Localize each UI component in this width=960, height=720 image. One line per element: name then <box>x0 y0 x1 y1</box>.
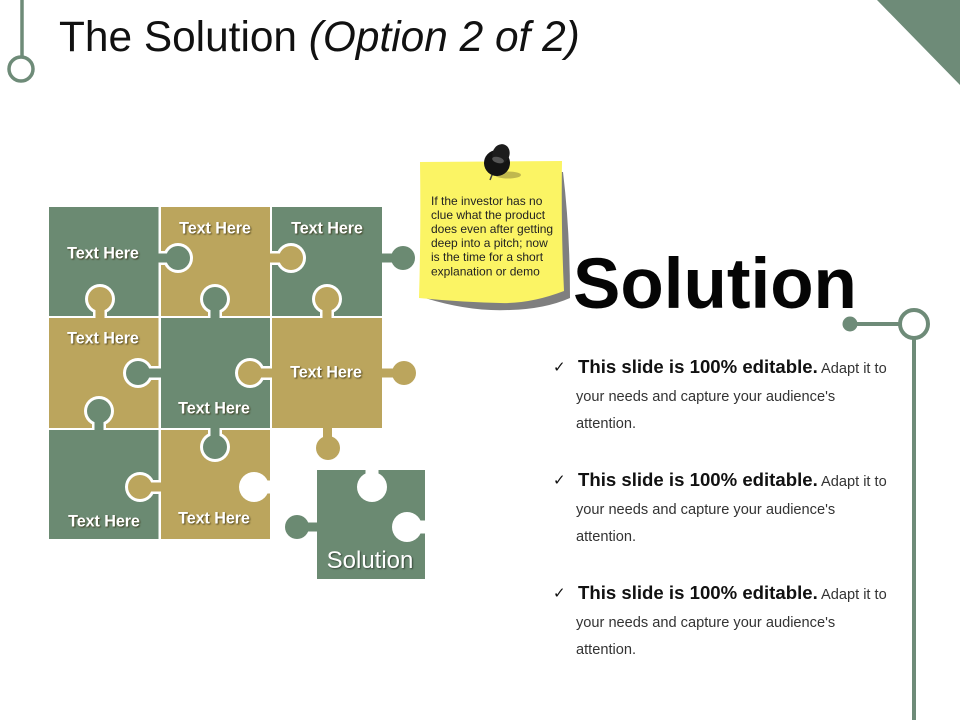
note text: does even after getting <box>431 222 553 236</box>
right connector ornament <box>842 310 928 720</box>
knob: gold into row 3 column 1 <box>125 472 161 502</box>
note text: If the investor has no <box>431 194 543 208</box>
knob: gold outward right of row 2 <box>382 361 416 385</box>
bullet 1: attention. <box>576 416 636 432</box>
bullet 1: your needs and capture your audience's <box>576 389 835 405</box>
knob: left <box>285 515 318 539</box>
solution puzzle piece <box>285 469 426 579</box>
hole: top <box>357 469 387 502</box>
text: row 2 column 3: Text Here <box>290 364 362 382</box>
piece: row 3 column 2 <box>161 430 270 539</box>
bullet 2: This slide is 100% editable. Adapt it to <box>578 469 887 490</box>
piece: row 2 column 2 <box>161 318 270 428</box>
note text: clue what the product <box>431 208 546 222</box>
note text: explanation or demo <box>431 264 540 278</box>
jigsaw puzzle <box>49 207 416 539</box>
text: row 2 column 1: Text Here <box>67 330 139 348</box>
note text: deep into a pitch; now <box>431 236 548 250</box>
text: row 2 column 2: Text Here <box>178 400 250 418</box>
bullet 3: attention. <box>576 642 636 658</box>
text: row 3 column 2: Text Here <box>178 510 250 528</box>
knob: green into row 1 column 2 bottom <box>200 284 230 319</box>
big solution heading: Solution <box>573 245 857 324</box>
knob: gold into row 1 column 3 bottom <box>312 284 342 319</box>
bullet 3: your needs and capture your audience's <box>576 615 835 631</box>
knob: gold into row 1 column 3 <box>270 243 306 273</box>
knob: green outward right of row 1 <box>382 246 415 270</box>
hole: right <box>392 512 426 542</box>
note text <box>431 194 553 278</box>
note text: is the time for a short <box>431 250 544 264</box>
knob: gold into row 2 column 2 <box>235 358 273 388</box>
bullet 1: This slide is 100% editable. Adapt it to <box>578 356 887 377</box>
top-left connector ornament <box>9 0 33 81</box>
note paper <box>419 161 564 303</box>
piece: row 1 column 3 <box>272 207 382 316</box>
piece: row 2 column 3 <box>272 318 382 428</box>
text: row 1 column 2: Text Here <box>179 220 251 238</box>
bullet 2: ✓ <box>553 471 566 489</box>
bullet 2: your needs and capture your audience's <box>576 502 835 518</box>
bullet 3: This slide is 100% editable. Adapt it to <box>578 582 887 603</box>
piece label: Solution <box>327 547 413 574</box>
title: The Solution (Option 2 of 2) <box>59 13 580 60</box>
knob: green into row 3 column 2 <box>200 427 230 462</box>
piece: row 1 column 1 <box>49 207 158 316</box>
bullet 1: ✓ <box>553 358 566 376</box>
top-right corner triangle <box>877 0 960 85</box>
bullet 3: ✓ <box>553 584 566 602</box>
bullet 2 <box>553 469 887 545</box>
knob: green into row 1 column 2 <box>158 243 193 273</box>
piece: row 1 column 2 <box>161 207 270 316</box>
text: row 1 column 1: Text Here <box>67 244 139 262</box>
piece: row 3 column 1 <box>49 430 158 539</box>
knob: green into row 2 column 1 bottom <box>84 396 114 431</box>
knob: gold into row 1 column 1 <box>85 284 115 319</box>
bullet 3 <box>553 582 887 658</box>
piece: row 2 column 1 <box>49 318 158 428</box>
icon: push pin <box>480 142 521 180</box>
text: row 3 column 1: Text Here <box>68 512 140 530</box>
text: row 1 column 3: Text Here <box>291 220 363 238</box>
hole: row 3 column 2 right <box>239 472 271 502</box>
bullet 1 <box>553 356 887 432</box>
knob: gold outward below row 2 <box>316 428 340 460</box>
note shadow <box>425 172 570 310</box>
sticky note <box>419 161 570 310</box>
knob: green into row 2 column 1 <box>123 358 161 388</box>
bullet 2: attention. <box>576 529 636 545</box>
